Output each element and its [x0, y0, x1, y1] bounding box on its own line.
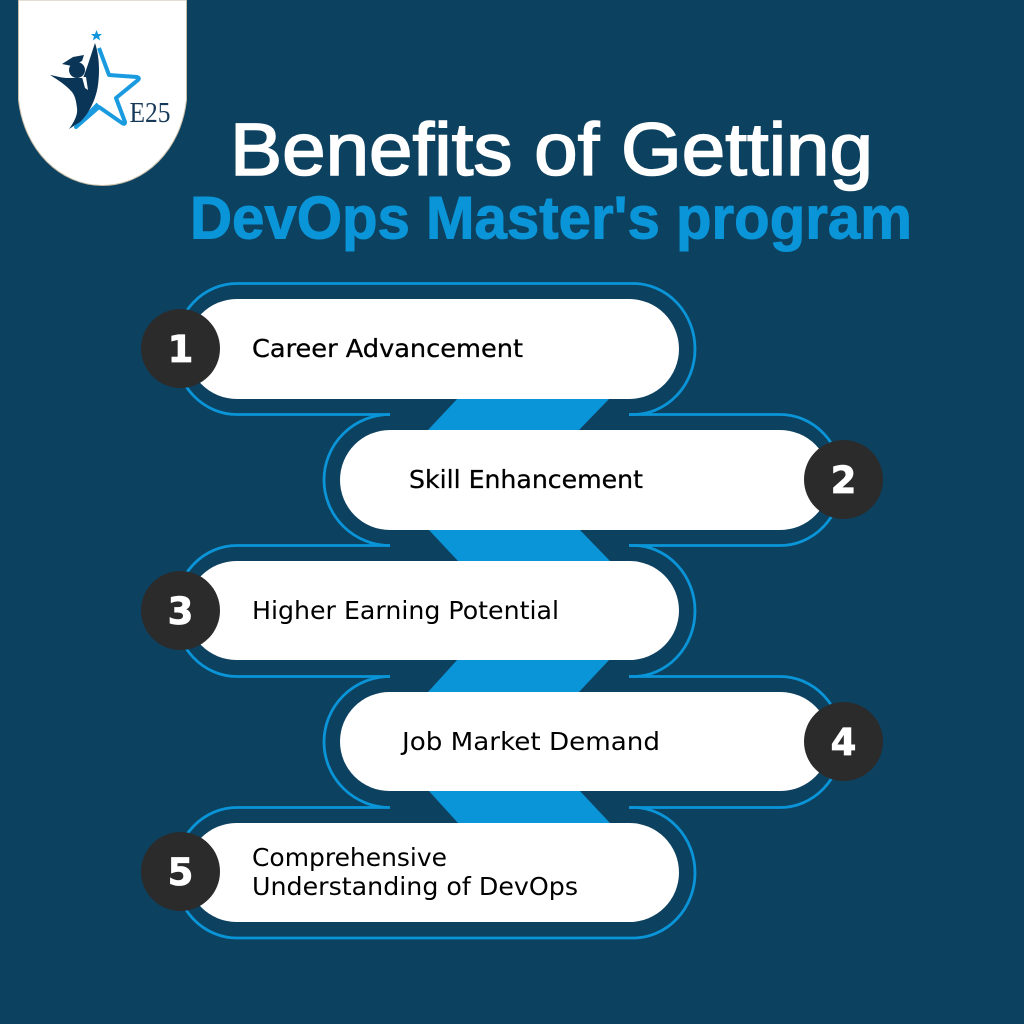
logo text: E25	[130, 97, 170, 129]
subtitle: DevOps Master's program	[190, 184, 912, 252]
step 5: Understanding of DevOps	[252, 872, 578, 901]
step 4: Job Market Demand	[400, 727, 660, 756]
step 4	[340, 692, 883, 791]
step 5: Comprehensive	[252, 843, 447, 872]
step 2	[340, 430, 883, 530]
title: Benefits of Getting	[230, 108, 873, 191]
step 1: Career Advancement	[252, 334, 523, 363]
step 5	[141, 823, 679, 922]
step 4: 4	[831, 721, 856, 764]
step 2: 2	[831, 459, 856, 502]
logo badge	[18, 0, 186, 186]
step 2: Skill Enhancement	[409, 465, 643, 494]
icon: graduate figure	[50, 43, 99, 129]
step 3: Higher Earning Potential	[252, 596, 559, 625]
icon: blue outlined star	[76, 48, 139, 127]
step 3	[141, 561, 679, 660]
outline connectors	[175, 284, 842, 938]
icon: small star	[91, 30, 102, 40]
step 1	[141, 299, 679, 399]
step 3: 3	[168, 590, 193, 633]
step 1: 1	[168, 328, 193, 371]
step 5: 5	[168, 851, 193, 894]
zigzag connector	[428, 398, 610, 823]
